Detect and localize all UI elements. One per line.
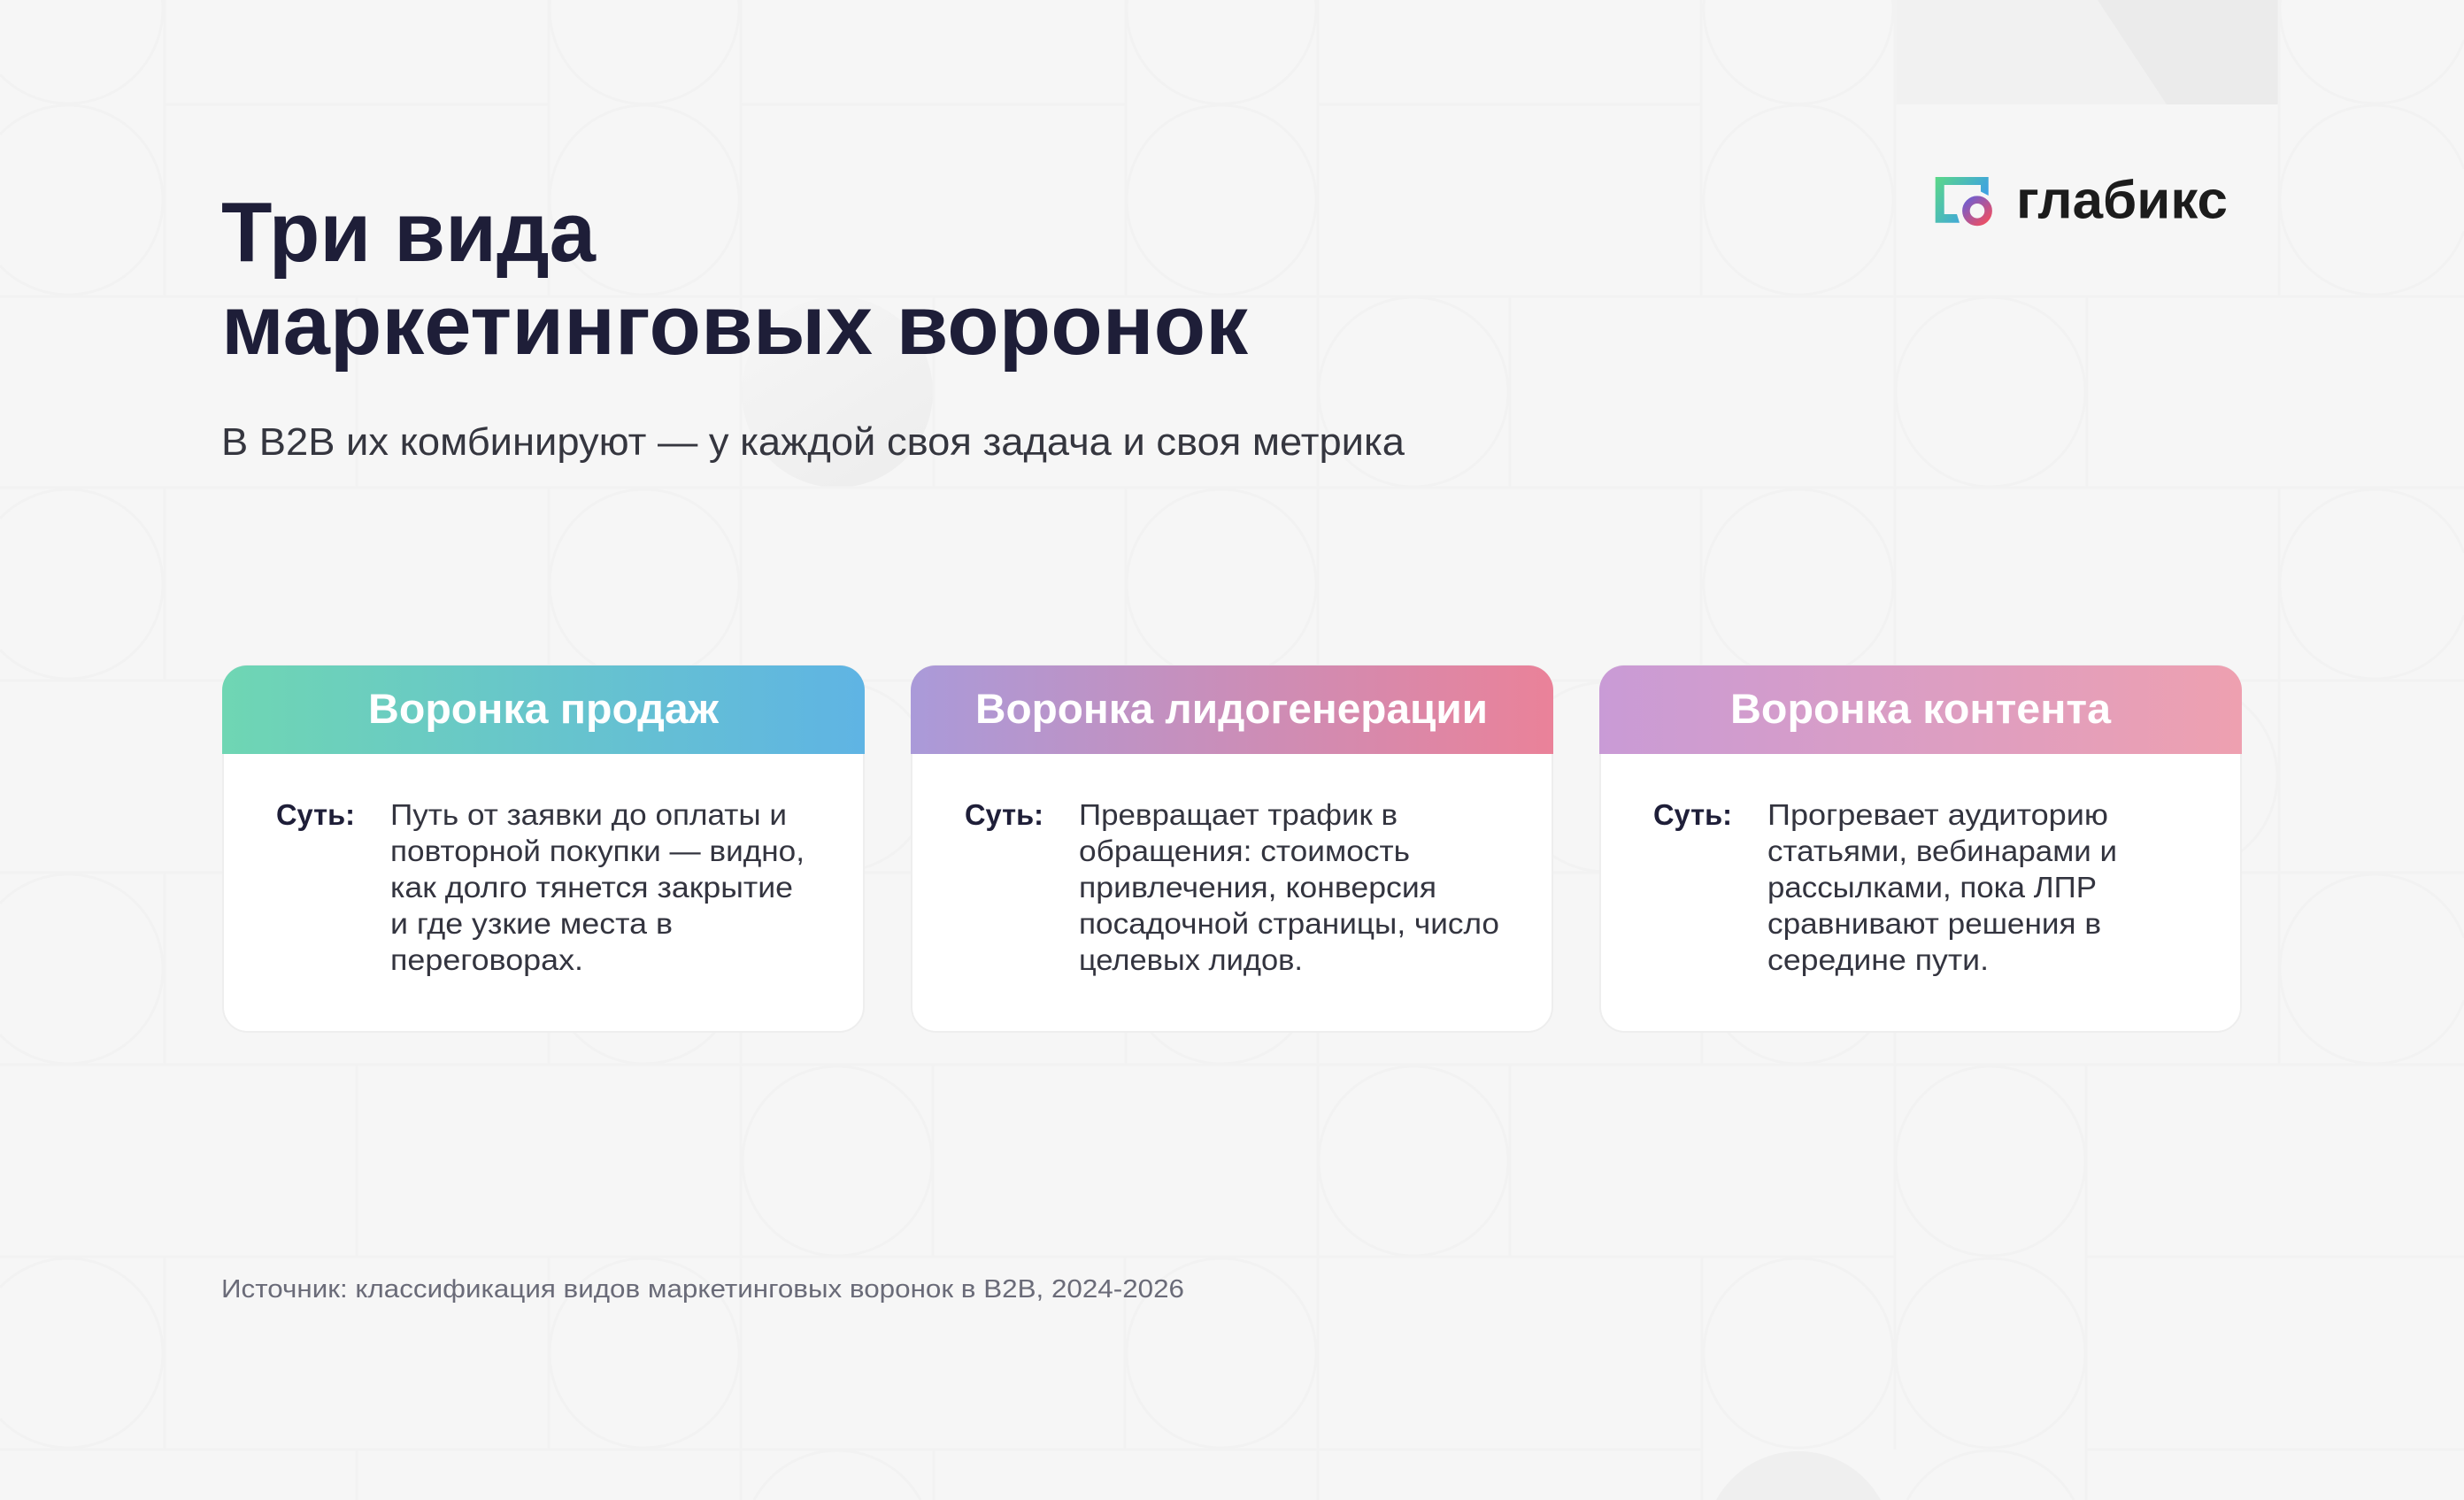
card body text: привлечения, конверсия bbox=[1079, 871, 1436, 904]
logo wordmark: глабикс bbox=[2016, 171, 2228, 230]
card header bbox=[911, 665, 1553, 754]
card body text: обращения: стоимость bbox=[1079, 835, 1410, 867]
subtitle: В B2B их комбинируют — у каждой своя задача и своя метрика bbox=[221, 420, 1405, 464]
card label: Суть: bbox=[1653, 798, 1732, 831]
card body text: посадочной страницы, число bbox=[1079, 907, 1499, 940]
panel: Воронка продаж bbox=[222, 665, 865, 1032]
card body text: повторной покупки — видно, bbox=[390, 835, 805, 867]
card body text bbox=[390, 798, 805, 976]
card body text: середине пути. bbox=[1767, 943, 1989, 976]
card header: Воронка лидогенерации bbox=[975, 685, 1488, 732]
card body text: статьями, вебинарами и bbox=[1767, 835, 2117, 867]
source note: Источник: классификация видов маркетинговых воронок в B2B, 2024-2026 bbox=[221, 1275, 1184, 1304]
card body text bbox=[1767, 798, 2117, 976]
card body text: как долго тянется закрытие bbox=[390, 871, 793, 904]
card body text: и где узкие места в bbox=[390, 907, 673, 940]
card body text: переговорах. bbox=[390, 943, 583, 976]
icon: logo square and ring bbox=[1936, 177, 1989, 223]
title bbox=[221, 185, 1249, 373]
card header: Воронка продаж bbox=[368, 685, 720, 732]
card body text bbox=[1079, 798, 1499, 976]
panel: Воронка контента bbox=[1599, 665, 2242, 1032]
card label: Суть: bbox=[965, 798, 1043, 831]
card body text: целевых лидов. bbox=[1079, 943, 1303, 976]
card header bbox=[222, 665, 865, 754]
card label: Суть: bbox=[276, 798, 355, 831]
logo: глабикс bbox=[1936, 171, 2228, 230]
card body text: Превращает трафик в bbox=[1079, 798, 1398, 831]
title: маркетинговых воронок bbox=[221, 278, 1249, 373]
card body text: рассылками, пока ЛПР bbox=[1767, 871, 2097, 904]
card body text: сравнивают решения в bbox=[1767, 907, 2101, 940]
card body text: Прогревает аудиторию bbox=[1767, 798, 2108, 831]
card header: Воронка контента bbox=[1730, 685, 2112, 732]
card header bbox=[1599, 665, 2242, 754]
card body text: Путь от заявки до оплаты и bbox=[390, 798, 787, 831]
panel: Воронка лидогенерации bbox=[911, 665, 1553, 1032]
title: Три вида bbox=[221, 185, 597, 280]
